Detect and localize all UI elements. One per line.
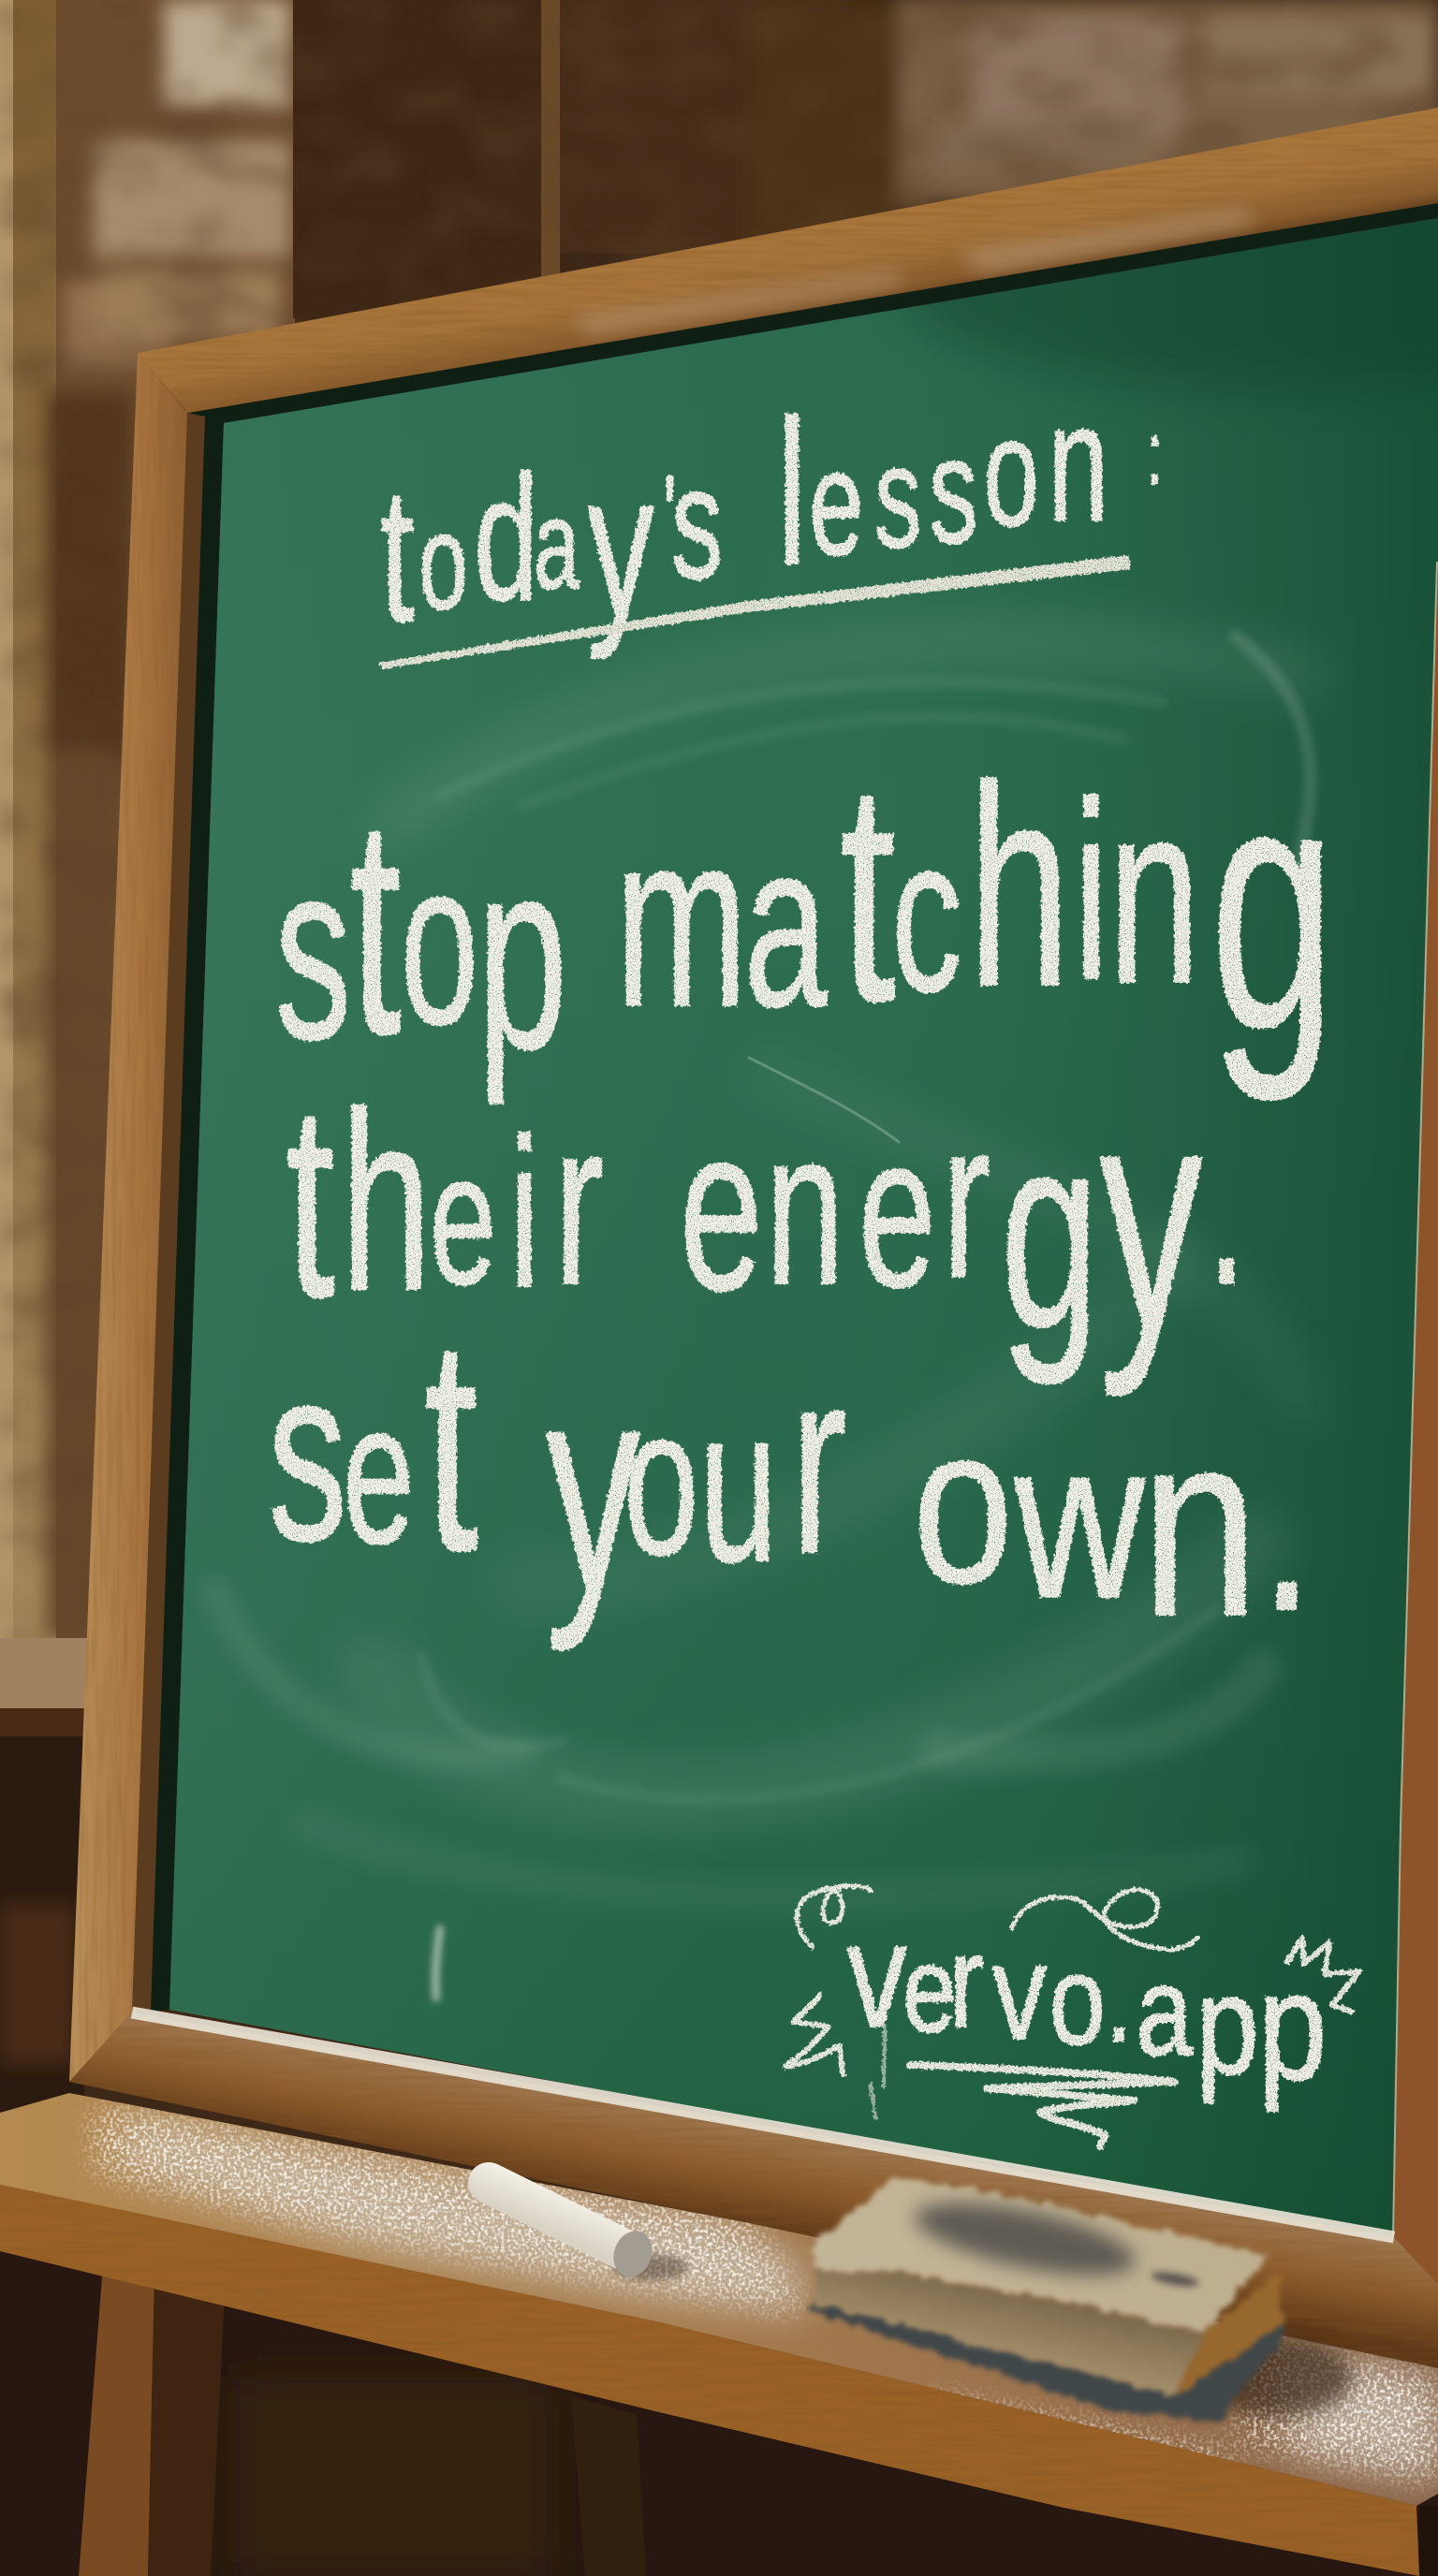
- chalk tray: [0, 2093, 1438, 2576]
- main message: line 1: t: [840, 715, 897, 1066]
- main message: line 1: g: [1211, 710, 1335, 1104]
- heading: today's lesson: :: [1147, 404, 1163, 504]
- main message: line 3: y: [546, 1324, 640, 1653]
- main message: line 3: e: [343, 1362, 415, 1586]
- main message: line 2: r: [943, 1074, 990, 1325]
- heading: today's lesson: t: [380, 446, 415, 662]
- heading: today's lesson: l: [777, 378, 807, 607]
- eraser base: [808, 2301, 1288, 2422]
- main message: line 1: n: [1108, 749, 1200, 1036]
- heading underline: [379, 555, 1130, 669]
- main message: line 3: [268, 1274, 1313, 1671]
- frame: right rail: [1394, 562, 1438, 2284]
- eraser front face: [815, 2269, 1205, 2395]
- main message: line 1: h: [968, 727, 1070, 1046]
- main message: line 3: u: [699, 1361, 778, 1607]
- dark floor area under tray: [0, 2247, 1438, 2576]
- heading: today's lesson: [380, 370, 1163, 662]
- brand: vervo.app: o: [1049, 1928, 1106, 2071]
- main message: line 2: t: [286, 1046, 335, 1354]
- main message: line 2: .: [1207, 1080, 1247, 1331]
- panel: chalkboard surface: [132, 168, 1438, 2256]
- heading: today's lesson: ': [663, 452, 677, 578]
- main message: line 1: o: [401, 811, 478, 1073]
- main message: line 3: n: [1141, 1377, 1258, 1671]
- icon: chalk stick: [489, 2183, 688, 2282]
- easel legs: [79, 2265, 1438, 2576]
- main message: line 1: [275, 710, 1335, 1105]
- heading: today's lesson: d: [474, 438, 538, 637]
- frame: bottom rail: [66, 2012, 1438, 2368]
- brand: vervo.app: r: [949, 1908, 984, 2055]
- icon: felt eraser: [808, 2177, 1353, 2422]
- main message: line 3: o: [913, 1380, 1013, 1631]
- main message: line 3: w: [1014, 1395, 1146, 1646]
- heading: today's lesson: s: [874, 416, 921, 578]
- brand: vervo.app: v: [992, 1916, 1047, 2068]
- main message: line 1: p: [477, 804, 567, 1105]
- main message: line 1: t: [350, 754, 402, 1098]
- main message: line 1: a: [744, 795, 828, 1056]
- main message: line 3: o: [624, 1365, 698, 1600]
- main message: line 2: e: [680, 1078, 763, 1339]
- heading: today's lesson: s: [930, 406, 978, 574]
- main message: line 2: n: [766, 1084, 844, 1330]
- smudged eraser marks: [215, 637, 1311, 1998]
- main message: line 2: e: [858, 1091, 936, 1333]
- brand: vervo.app: v: [847, 1891, 907, 2058]
- brand: vervo.app: .: [1106, 1931, 1133, 2068]
- main message: line 1: s: [275, 810, 351, 1092]
- main message: line 2: i: [509, 1094, 539, 1332]
- heading: today's lesson: e: [810, 418, 863, 586]
- chalk dust piles: [94, 2106, 1438, 2481]
- brand: vervo.app: a: [1137, 1939, 1193, 2082]
- frame: top rail: [131, 103, 1438, 421]
- main message: line 1: c: [891, 791, 962, 1037]
- main message: line 2: g: [1001, 1077, 1099, 1385]
- heading: today's lesson: n: [1048, 370, 1108, 557]
- eraser side: [1175, 2270, 1283, 2395]
- brand: vervo.app: p: [1196, 1946, 1258, 2103]
- main message: line 1: i: [1073, 751, 1109, 1032]
- main message: line 2: h: [341, 1061, 432, 1343]
- eraser cast shadow: [1203, 2338, 1353, 2417]
- eraser top face: [815, 2177, 1269, 2333]
- main message: line 2: [286, 1037, 1247, 1398]
- main message: line 1: m: [615, 783, 748, 1059]
- heading: today's lesson: o: [418, 485, 468, 637]
- shelf on the left wall: [0, 1638, 89, 2576]
- main message: line 3: t: [424, 1274, 479, 1614]
- main message: line 2: e: [430, 1114, 496, 1324]
- main message: line 3: r: [791, 1314, 846, 1608]
- main message: line 3: .: [1260, 1389, 1313, 1661]
- heading: today's lesson: a: [534, 475, 580, 616]
- frame: left rail: [69, 354, 187, 2082]
- heading: today's lesson: o: [983, 387, 1039, 559]
- doodles around brand: [785, 1886, 1359, 2146]
- brand: vervo.app: e: [902, 1921, 957, 2057]
- tray top surface: [0, 2093, 1438, 2506]
- chalk writing: [268, 370, 1359, 2146]
- heading: today's lesson: y: [587, 431, 654, 660]
- heading: today's lesson: s: [671, 434, 723, 612]
- main message: line 2: r: [554, 1073, 604, 1334]
- main message: line 3: s: [268, 1317, 347, 1593]
- tray front edge: [0, 2181, 1438, 2576]
- brand: vervo.app: p: [1258, 1939, 1327, 2112]
- main message: line 2: y: [1099, 1037, 1203, 1398]
